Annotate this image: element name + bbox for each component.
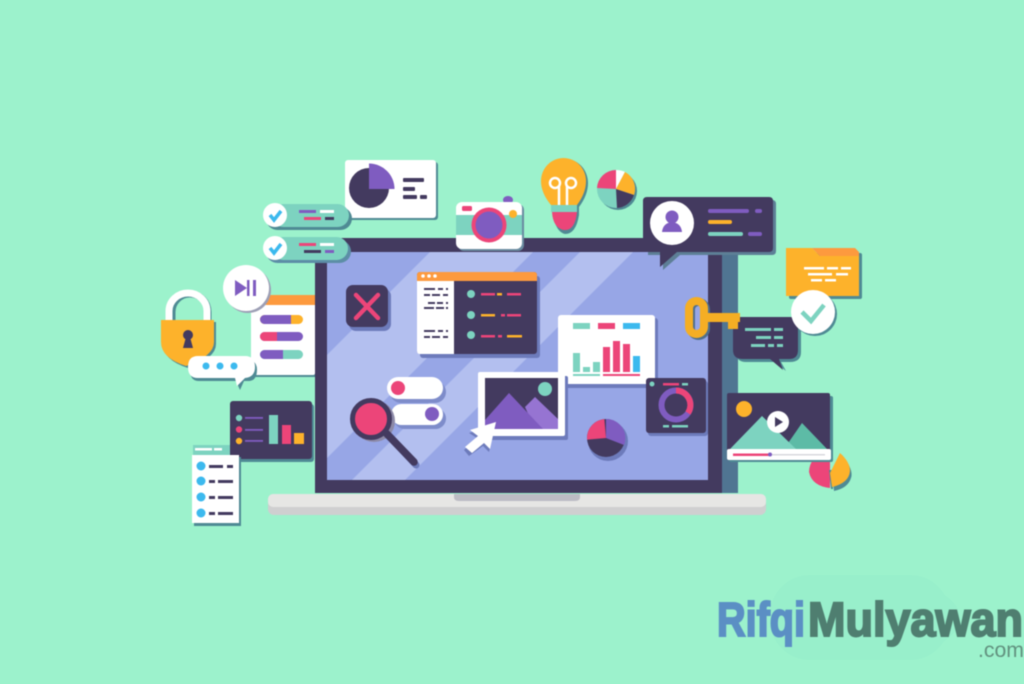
donut chart card	[646, 378, 708, 436]
checklist pill 1	[263, 203, 352, 230]
pie chart on screen	[585, 419, 628, 461]
icon: play pause button	[223, 265, 271, 313]
icon: mouse cursor	[464, 422, 496, 456]
icon: close tile	[346, 285, 391, 331]
icon: small pie chart	[597, 170, 637, 210]
speech bubble: dark message	[733, 317, 801, 371]
panel: list card	[192, 445, 241, 526]
logo: RifqiMulyawan.com	[717, 575, 1024, 662]
dark legend bar chart	[230, 401, 314, 462]
icon: padlock	[161, 293, 216, 368]
image card with mountains	[478, 372, 568, 440]
checklist pill 2	[263, 236, 351, 263]
icon: camera	[456, 196, 524, 251]
search toggles and magnifier	[352, 377, 446, 465]
logo word: Rifqi: Rifqi	[717, 594, 805, 647]
speech bubble: user profile	[643, 197, 776, 270]
panel: bars window	[251, 295, 315, 377]
speech bubble with dots	[188, 356, 257, 390]
icon: split pie chart	[809, 453, 852, 491]
icon: folder	[786, 248, 862, 299]
logo domain: .com: .com	[978, 639, 1024, 662]
laptop	[268, 238, 766, 515]
illustration canvas	[160, 157, 1024, 658]
icon: light bulb	[541, 158, 588, 234]
panel: code window	[417, 272, 540, 358]
panel: video player	[727, 393, 833, 462]
bar chart card	[558, 315, 658, 388]
icon: key	[689, 301, 740, 336]
icon: check badge	[791, 290, 837, 336]
panel: pie chart card	[345, 160, 438, 220]
